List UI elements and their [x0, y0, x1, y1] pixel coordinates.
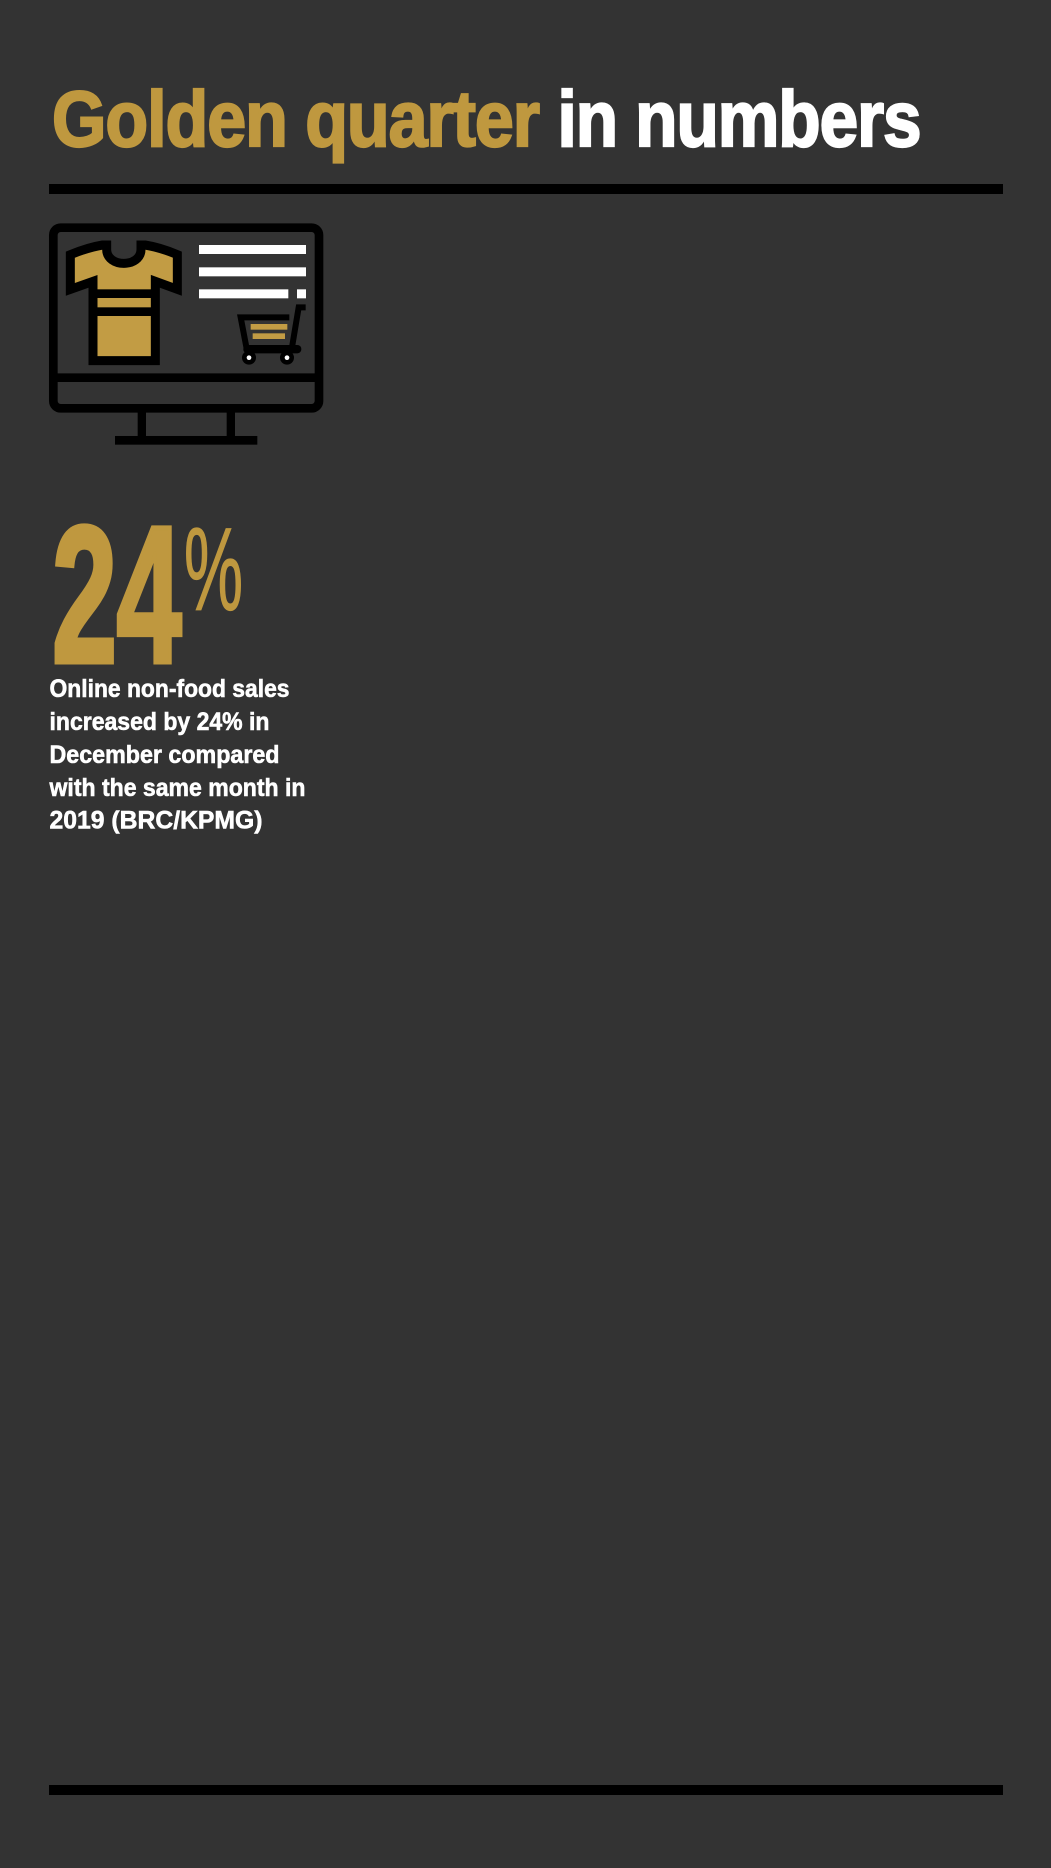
big number: 24%: 24: [52, 486, 181, 704]
description text: Online non-food sales: [50, 675, 290, 703]
description text: 2019 (BRC/KPMG): [50, 806, 262, 834]
icon: t-shirt: [70, 245, 177, 361]
description text: with the same month in: [49, 774, 306, 802]
top rule: [49, 184, 1003, 194]
icon: computer monitor with shirt and shopping cart: [53, 228, 319, 445]
big number: 24%: %: [184, 504, 243, 636]
description text: December compared: [50, 741, 280, 769]
monitor frame: [53, 228, 319, 408]
title: in numbers: [558, 74, 920, 163]
product text lines: [199, 245, 306, 298]
description text: increased by 24% in: [50, 708, 270, 736]
icon: shopping cart: [241, 307, 306, 365]
title: Golden quarter: [52, 74, 539, 163]
title: [52, 74, 920, 163]
monitor stand: [115, 410, 257, 445]
bottom rule: [49, 1785, 1003, 1795]
description text: [49, 675, 306, 834]
